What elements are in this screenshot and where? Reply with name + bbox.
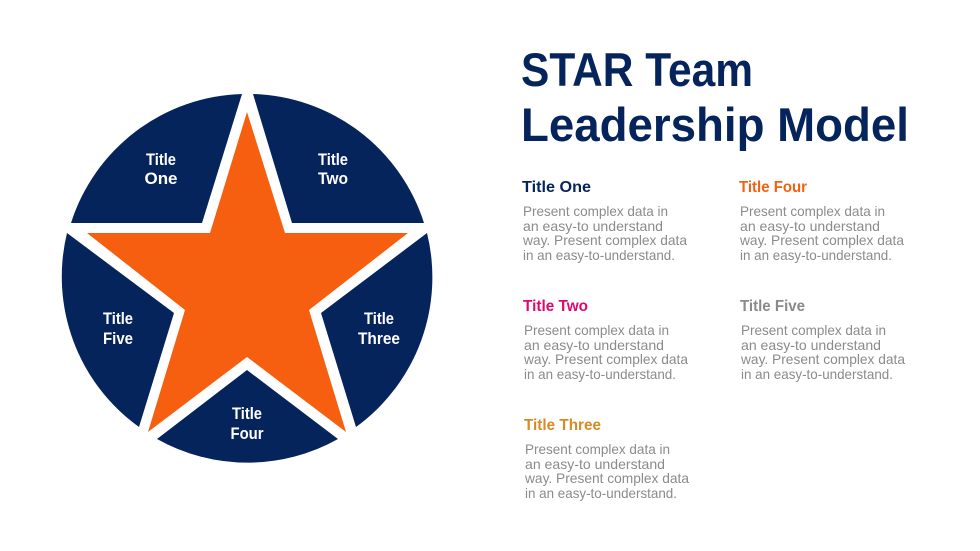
segment: title one: Title	[146, 151, 176, 169]
segment: title three	[321, 233, 432, 427]
text block: title three	[524, 417, 689, 501]
text block: title four: Title Four	[739, 179, 807, 196]
text block: title three: Present complex data in	[525, 442, 670, 457]
segment: title two: Two	[318, 170, 348, 188]
text block: title three: in an easy-to-understand.	[525, 486, 677, 501]
segment: title five: Five	[103, 330, 133, 348]
segment: title four: Four	[230, 425, 264, 443]
segment: title five: Title	[103, 310, 133, 328]
segment: title one	[71, 94, 242, 223]
text block: title one: way. Present complex data	[522, 233, 687, 248]
segment: title three: Three	[358, 330, 400, 348]
text block: title two: way. Present complex data	[523, 352, 688, 367]
title	[521, 43, 909, 151]
text block: title three: Title Three	[524, 417, 601, 434]
text block: title four: Present complex data in	[740, 204, 885, 219]
text block: title two: Present complex data in	[524, 323, 669, 338]
text block: title three: an easy-to understand	[525, 457, 665, 472]
text block: title five: an easy-to understand	[741, 338, 881, 353]
text block: title five: Title Five	[740, 298, 805, 315]
segment: title one: One	[144, 170, 178, 188]
text block: title four	[739, 179, 904, 263]
text block: title one: Title One	[522, 179, 591, 196]
segment: title two: Title	[318, 151, 348, 169]
text block: title four: way. Present complex data	[739, 233, 904, 248]
title: Leadership Model	[521, 98, 909, 151]
text block: title one: Present complex data in	[523, 204, 668, 219]
text block: title four: in an easy-to-understand.	[740, 248, 892, 263]
text block: title four: an easy-to understand	[740, 219, 880, 234]
orange star	[87, 112, 408, 432]
text block: title five: in an easy-to-understand.	[741, 367, 893, 382]
text block: title two: an easy-to understand	[524, 338, 664, 353]
text block: title one	[522, 179, 687, 263]
text block: title two: in an easy-to-understand.	[524, 367, 676, 382]
text block: title three: way. Present complex data	[524, 471, 689, 486]
star circle diagram	[62, 94, 432, 463]
segment: title two	[253, 94, 424, 223]
text block: title five: way. Present complex data	[740, 352, 905, 367]
text block: title five	[740, 298, 905, 382]
segment: title four: Title	[232, 405, 262, 423]
text block: title two: Title Two	[523, 298, 588, 315]
segment: title four	[157, 370, 338, 463]
text block: title five: Present complex data in	[741, 323, 886, 338]
title: STAR Team	[521, 43, 753, 96]
text block: title two	[523, 298, 688, 382]
text block: title one: in an easy-to-understand.	[523, 248, 675, 263]
text block: title one: an easy-to understand	[523, 219, 663, 234]
segment: title three: Title	[364, 310, 394, 328]
segment: title five	[62, 233, 174, 427]
